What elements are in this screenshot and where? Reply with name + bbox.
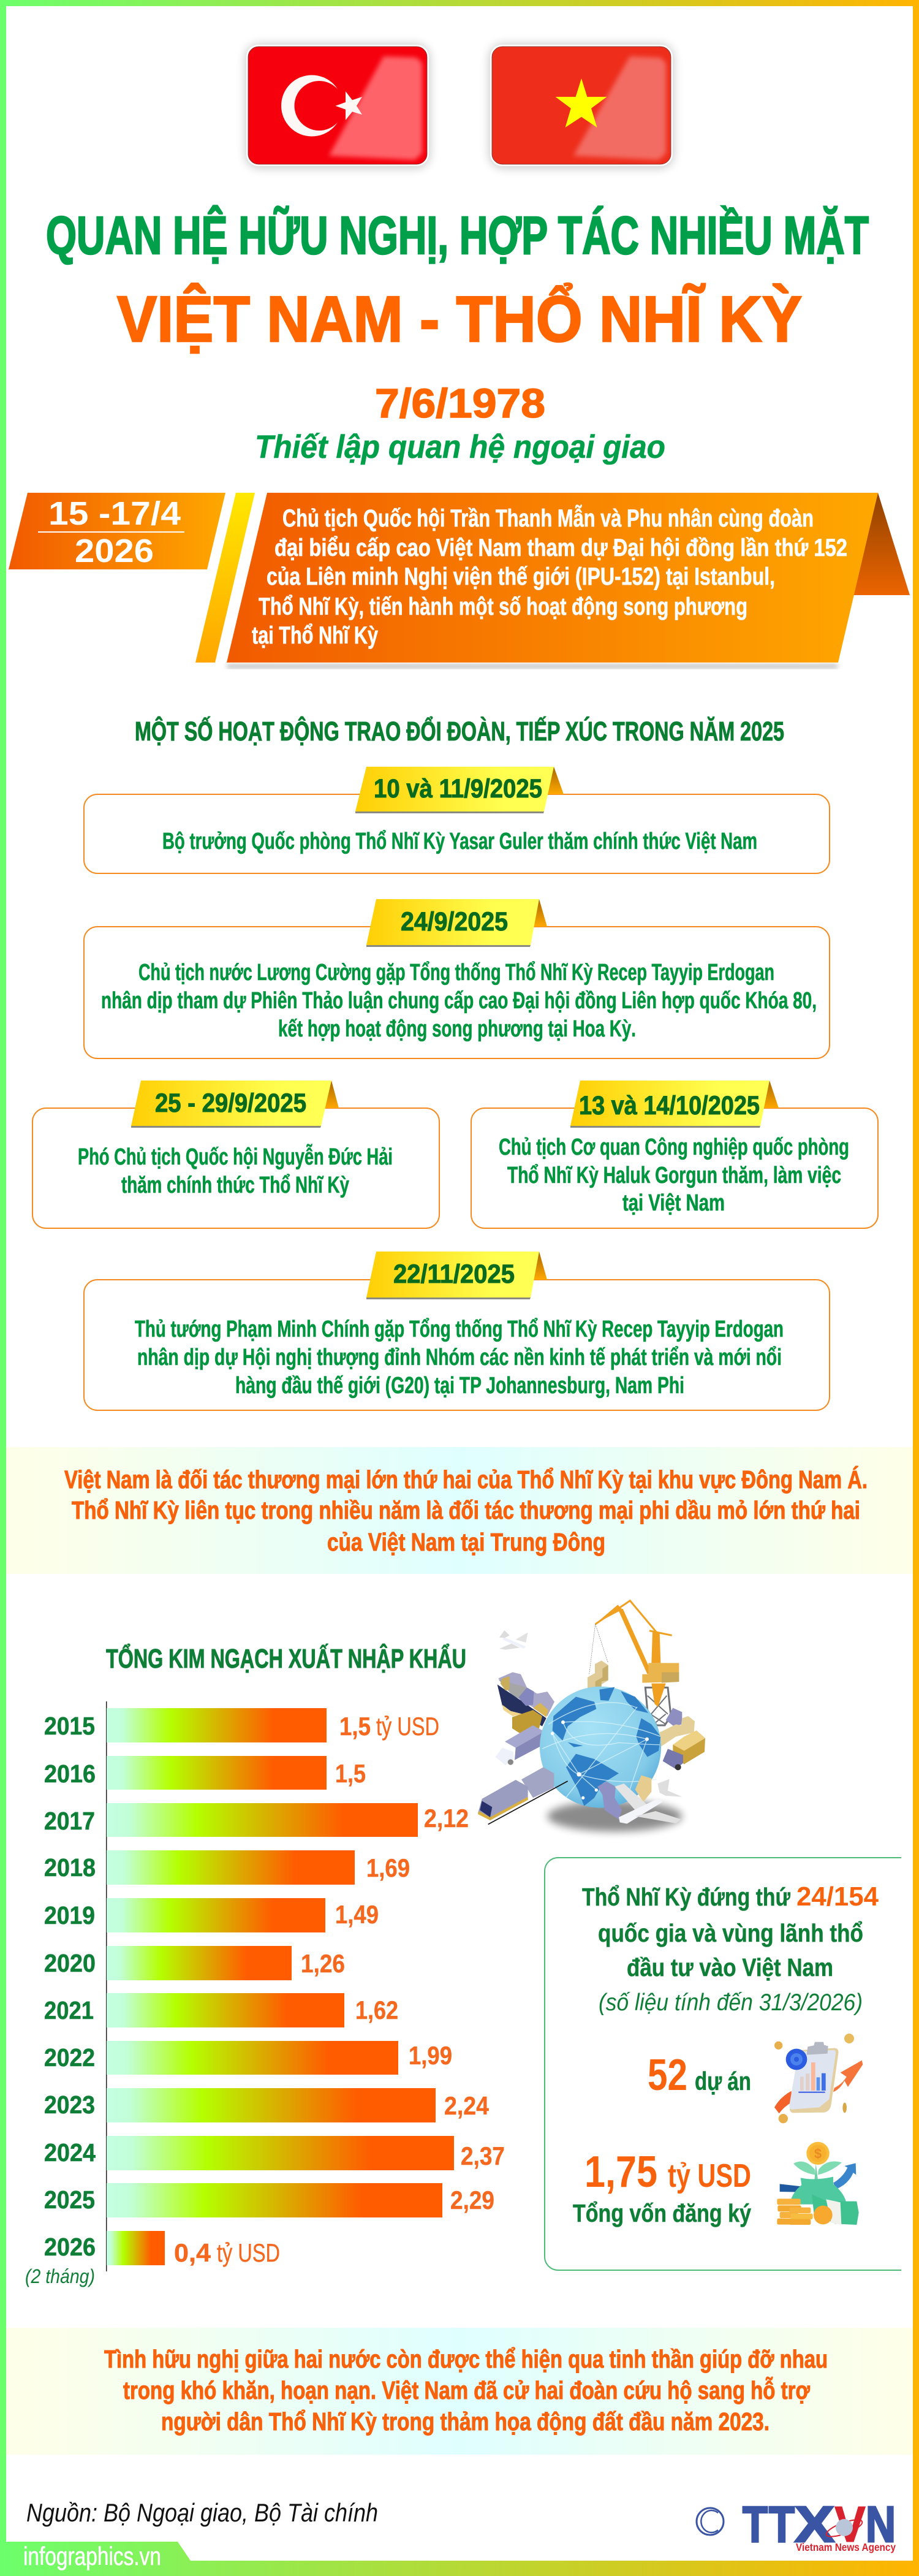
stat: registered capital: 1,75 <box>584 2148 657 2197</box>
panel: news banner: của Liên minh Nghị viện thế giới (IPU-152) tại Istanbul, <box>267 563 775 590</box>
bar 2017: 2017 <box>44 1807 95 1835</box>
heading: trade chart: TỔNG KIM NGẠCH XUẤT NHẬP KHẨU <box>106 1643 466 1674</box>
panel: activity 10 và 11/9/2025 <box>84 767 830 873</box>
panel: activity 25 - 29/9/2025: Phó Chủ tịch Quốc hội Nguyễn Đức Hải <box>78 1143 393 1170</box>
ship <box>497 1672 554 1727</box>
bar 2015: 1,5 <box>339 1712 371 1741</box>
logo: TTXVN: N <box>866 2496 896 2553</box>
bar 2018: 2018 <box>44 1853 96 1882</box>
bar 2023: 2023 <box>44 2091 95 2119</box>
bar 2015: 2015 <box>44 1712 95 1740</box>
bar 2026: (2 tháng) <box>25 2265 95 2287</box>
panel: activity 22/11/2025: 22/11/2025 <box>393 1260 515 1289</box>
panel: activity 13 và 14/10/2025: tại Việt Nam <box>622 1190 725 1216</box>
crane <box>589 1601 679 1725</box>
investment ranking text: đầu tư vào Việt Nam <box>627 1953 833 1981</box>
bar 2015: tỷ USD <box>376 1712 439 1741</box>
date badge <box>9 493 225 569</box>
investment ranking text: (số liệu tính đến 31/3/2026) <box>599 1989 863 2016</box>
bar 2024: 2,37 <box>461 2141 505 2170</box>
investment ranking text: Thổ Nhĩ Kỳ đứng thứ <box>582 1883 790 1911</box>
hanging cargo <box>588 1660 608 1695</box>
bar 2025: 2025 <box>44 2186 95 2214</box>
bar 2025 <box>44 2183 494 2217</box>
investment ranking text: quốc gia và vùng lãnh thổ <box>598 1919 863 1947</box>
source: Nguồn: Bộ Ngoại giao, Bộ Tài chính <box>26 2498 378 2527</box>
logo: TTXVN: T <box>769 2496 795 2553</box>
bar 2026: 0,4 <box>174 2238 211 2267</box>
bar 2018: 1,69 <box>366 1853 410 1882</box>
website: infographics.vn <box>23 2542 161 2570</box>
panel: activity 25 - 29/9/2025 <box>32 1081 439 1228</box>
date established: 7/6/1978 <box>375 381 545 427</box>
date established <box>255 381 665 465</box>
bar 2022 <box>44 2041 452 2075</box>
bar 2025: 2,29 <box>450 2186 494 2214</box>
train <box>478 1767 568 1825</box>
stat: registered capital <box>573 2148 751 2227</box>
investment ranking text <box>582 1882 879 2016</box>
icon: money plant <box>777 2142 859 2225</box>
bar 2018 <box>44 1850 410 1885</box>
footer bar <box>0 2542 919 2576</box>
panel: activity 22/11/2025: hàng đầu thế giới (G20) tại TP Johannesburg, Nam Phi <box>235 1373 684 1399</box>
bar 2017 <box>44 1803 469 1837</box>
callout: trade partner: của Việt Nam tại Trung Đông <box>327 1528 605 1556</box>
panel: news banner <box>227 493 910 668</box>
bar 2024 <box>44 2136 505 2170</box>
date badge: 2026 <box>75 533 154 569</box>
globe <box>540 1687 661 1808</box>
bar 2021: 2021 <box>44 1996 94 2024</box>
bar 2026: 2026 <box>44 2233 96 2261</box>
bar 2016 <box>44 1756 366 1790</box>
main plane <box>597 1776 682 1824</box>
stat: projects: dự án <box>695 2067 751 2095</box>
icon: Turkey flag <box>246 44 429 168</box>
investment ranking text: 24/154 <box>796 1882 879 1912</box>
bar 2016: 2016 <box>44 1760 96 1788</box>
logo: TTXVN <box>697 2496 896 2553</box>
bar 2015 <box>44 1708 439 1742</box>
icon: global logistics illustration <box>478 1601 705 1831</box>
panel: activity 13 và 14/10/2025 <box>471 1081 878 1228</box>
title <box>46 206 869 355</box>
bar 2020: 2020 <box>44 1949 96 1977</box>
bar 2026: tỷ USD <box>217 2238 280 2267</box>
panel: news banner: Thổ Nhĩ Kỳ, tiến hành một số hoạt động song phương <box>259 593 747 620</box>
right crates and truck <box>660 1708 705 1770</box>
small plane <box>499 1630 528 1650</box>
panel: activity 24/9/2025 <box>84 899 830 1058</box>
panel: activity 24/9/2025: 24/9/2025 <box>401 907 508 937</box>
icon: Vietnam flag <box>490 44 673 168</box>
stat: projects <box>648 2051 751 2100</box>
bar 2023 <box>44 2088 490 2122</box>
stat: registered capital: Tổng vốn đăng ký <box>573 2199 751 2227</box>
icon: clipboard chart <box>774 2034 863 2123</box>
bar 2021 <box>44 1993 398 2027</box>
bar 2022: 1,99 <box>409 2041 452 2070</box>
logo: TTXVN: T <box>743 2496 768 2553</box>
logo: TTXVN: X <box>795 2496 834 2553</box>
bar 2020 <box>44 1946 345 1980</box>
bar 2019 <box>44 1898 379 1932</box>
panel: activity 25 - 29/9/2025: 25 - 29/9/2025 <box>155 1089 306 1118</box>
yellow stripe <box>195 493 255 663</box>
bar 2023: 2,24 <box>444 2091 490 2120</box>
logo: TTXVN: V <box>834 2496 866 2553</box>
panel: activity 10 và 11/9/2025: 10 và 11/9/2025 <box>374 774 542 804</box>
panel: news banner: tại Thổ Nhĩ Kỳ <box>252 622 379 649</box>
bar 2016: 1,5 <box>335 1759 366 1788</box>
bar 2017: 2,12 <box>424 1804 469 1833</box>
panel: activity 13 và 14/10/2025: 13 và 14/10/2025 <box>579 1091 760 1120</box>
bar 2021: 1,62 <box>355 1996 398 2024</box>
stat: registered capital: tỷ USD <box>668 2157 751 2194</box>
bar 2022: 2022 <box>44 2043 95 2072</box>
bar 2026 <box>25 2231 280 2287</box>
logo: TTXVN: Vietnam News Agency <box>796 2541 896 2553</box>
callout: earthquake rescue: người dân Thổ Nhĩ Kỳ trong thảm họa động đất đầu năm 2023. <box>161 2407 770 2436</box>
date established: Thiết lập quan hệ ngoại giao <box>255 429 665 465</box>
callout: trade partner <box>6 1447 913 1574</box>
panel: investment <box>545 1858 901 2270</box>
bar 2019: 1,49 <box>335 1900 379 1929</box>
panel: activity 24/9/2025: kết hợp hoạt động song phương tại Hoa Kỳ. <box>278 1016 636 1042</box>
left truck <box>495 1725 544 1765</box>
bar chart: trade turnover <box>25 1701 505 2287</box>
date badge: 15 -17/4 <box>48 495 181 532</box>
stat: projects: 52 <box>648 2051 687 2100</box>
title: VIỆT NAM - THỔ NHĨ KỲ <box>117 283 802 355</box>
callout: earthquake rescue <box>6 2328 913 2455</box>
panel: activity 25 - 29/9/2025: thăm chính thức Thổ Nhĩ Kỳ <box>121 1172 349 1198</box>
bar 2020: 1,26 <box>301 1949 345 1978</box>
panel: activity 22/11/2025 <box>84 1252 830 1410</box>
bar 2024: 2024 <box>44 2138 96 2167</box>
icon: money plant: $ <box>814 2146 822 2162</box>
bar 2019: 2019 <box>44 1901 95 1929</box>
